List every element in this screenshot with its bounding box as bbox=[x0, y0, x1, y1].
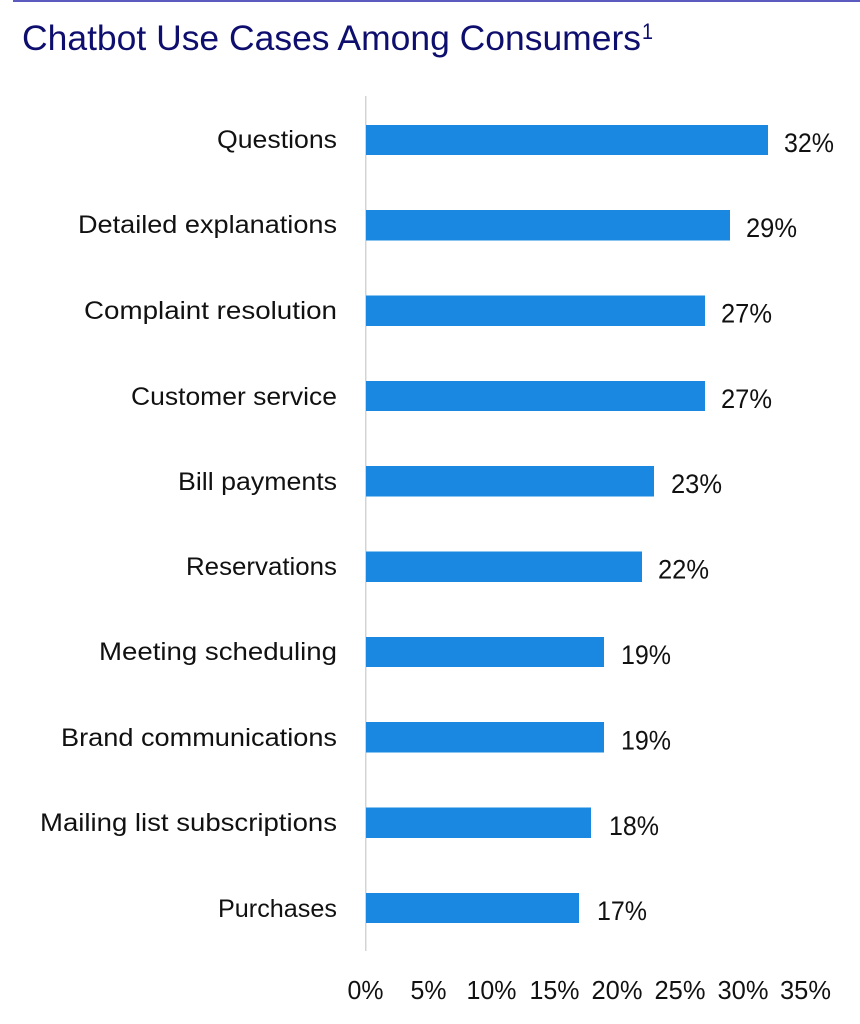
row: Brand communications 19%: Brand communications bbox=[61, 724, 337, 752]
x axis labels bbox=[348, 977, 831, 1005]
row: Complaint resolution 27%: 27% bbox=[721, 298, 772, 328]
x axis labels: 30% bbox=[718, 977, 768, 1005]
row: Purchases 17%: Purchases bbox=[218, 895, 337, 923]
row: Reservations 22%: 22% bbox=[658, 554, 709, 584]
row: Questions 32%: Questions bbox=[217, 126, 337, 154]
row: Mailing list subscriptions 18% bbox=[40, 808, 659, 841]
row: Purchases 17%: 17% bbox=[597, 896, 647, 926]
row: Purchases 17% bbox=[218, 893, 647, 926]
row: Bill payments 23%: 23% bbox=[671, 469, 722, 499]
x axis labels: 25% bbox=[654, 977, 706, 1005]
x axis labels: 5% bbox=[410, 977, 446, 1005]
row: Reservations 22% bbox=[186, 552, 709, 584]
x axis labels: 0% bbox=[348, 977, 384, 1005]
bar chart bbox=[40, 96, 834, 951]
row: Questions 32% bbox=[217, 125, 834, 158]
x axis labels: 20% bbox=[592, 977, 642, 1005]
x axis labels: 35% bbox=[780, 977, 831, 1005]
title: Chatbot Use Cases Among Consumers bbox=[22, 19, 641, 58]
row: Meeting scheduling 19%: 19% bbox=[621, 640, 671, 670]
x axis labels: 15% bbox=[530, 977, 580, 1005]
title: 1 bbox=[642, 19, 653, 44]
row: Detailed explanations 29% bbox=[78, 210, 797, 243]
row: Customer service 27%: 27% bbox=[721, 384, 772, 414]
row: Bill payments 23% bbox=[178, 466, 722, 499]
row: Mailing list subscriptions 18%: 18% bbox=[609, 811, 659, 841]
row: Complaint resolution 27% bbox=[84, 296, 772, 328]
row: Reservations 22%: Reservations bbox=[186, 553, 337, 581]
row: Complaint resolution 27%: Complaint resolution bbox=[84, 297, 337, 325]
row: Meeting scheduling 19% bbox=[99, 637, 671, 670]
row: Detailed explanations 29%: Detailed explanations bbox=[78, 211, 337, 239]
row: Meeting scheduling 19%: Meeting scheduling bbox=[99, 638, 337, 666]
x axis labels: 10% bbox=[466, 977, 516, 1005]
row: Questions 32%: 32% bbox=[784, 128, 834, 158]
row: Mailing list subscriptions 18%: Mailing list subscriptions bbox=[40, 809, 337, 837]
row: Customer service 27%: Customer service bbox=[131, 383, 337, 411]
row: Detailed explanations 29%: 29% bbox=[746, 213, 797, 243]
row: Customer service 27% bbox=[131, 381, 772, 414]
row: Brand communications 19%: 19% bbox=[621, 726, 671, 756]
row: Bill payments 23%: Bill payments bbox=[178, 468, 337, 496]
row: Brand communications 19% bbox=[61, 722, 671, 756]
